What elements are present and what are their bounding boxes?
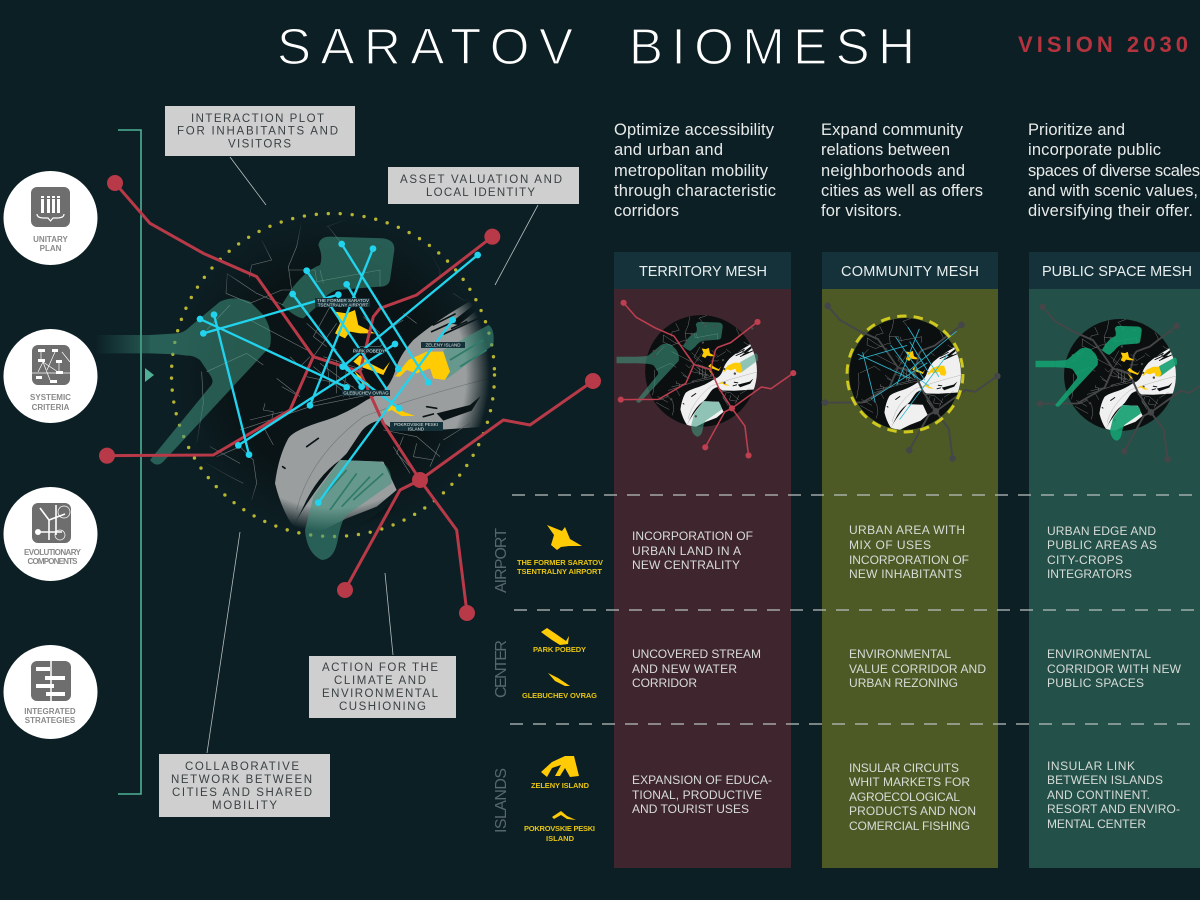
- text block: community airport: [849, 523, 969, 581]
- text block: community objective: for visitors.: [821, 202, 902, 220]
- subtitle: vision 2030: VISION 2030: [1018, 32, 1188, 57]
- map labels: ZELENY ISLAND: [426, 342, 461, 348]
- callout: collaborative network: MOBILITY: [212, 800, 277, 812]
- text block: community airport: NEW INHABITANTS: [849, 567, 962, 581]
- legend: airport: THE FORMER SARATOV: [517, 558, 603, 567]
- text block: community objective: relations between: [821, 141, 950, 159]
- public space mini map: [1036, 304, 1200, 463]
- text block: territory center: AND NEW WATER: [632, 662, 737, 676]
- text block: public space center: CORRIDOR WITH NEW: [1047, 662, 1182, 676]
- text block: territory airport: [632, 529, 753, 572]
- text block: territory center: [632, 647, 761, 690]
- callout: collaborative network: NETWORK BETWEEN: [171, 774, 312, 786]
- text block: territory airport: URBAN LAND IN A: [632, 544, 741, 558]
- text block: territory airport: NEW CENTRALITY: [632, 558, 740, 572]
- icon: evolutionary components: EVOLUTIONARY: [24, 548, 82, 557]
- callout: climate action: [309, 656, 456, 718]
- dashed row dividers: [510, 495, 1200, 724]
- text block: public space center: PUBLIC SPACES: [1047, 676, 1144, 690]
- panel: public space mesh column: PUBLIC SPACE MESH: [1042, 264, 1192, 280]
- map labels: ISLAND: [408, 426, 425, 432]
- legend: glebuchev ovrag: [522, 673, 597, 700]
- text block: public space objective: and with scenic values,: [1028, 182, 1198, 200]
- text block: community islands: COMERCIAL FISHING: [849, 819, 970, 833]
- callout: interaction plot: INTERACTION PLOT: [191, 113, 324, 125]
- callout: asset valuation: LOCAL IDENTITY: [426, 187, 535, 199]
- text block: community islands: [849, 761, 976, 833]
- text block: public space islands: RESORT AND ENVIRO-: [1047, 802, 1180, 816]
- callout: climate action: ACTION FOR THE: [322, 662, 438, 674]
- legend: park pobedy: PARK POBEDY: [533, 645, 586, 654]
- main map: [95, 175, 601, 621]
- map labels: POKROVSKIE PESKI: [394, 422, 438, 427]
- text block: public space objective: spaces of diverse scales: [1028, 162, 1200, 180]
- text block: public space airport: INTEGRATORS: [1047, 567, 1132, 581]
- icon: integrated strategies: [4, 645, 98, 739]
- legend: airport: TSENTRALNY AIRPORT: [517, 567, 602, 576]
- text block: territory islands: [632, 773, 772, 816]
- legend: glebuchev ovrag: GLEBUCHEV OVRAG: [522, 691, 597, 700]
- text block: public space islands: [1047, 759, 1180, 831]
- text block: territory objective: metropolitan mobility: [614, 162, 769, 180]
- callout: interaction plot: FOR INHABITANTS AND: [177, 126, 338, 138]
- panel: territory mesh column: [614, 252, 791, 868]
- text block: territory airport: INCORPORATION OF: [632, 529, 753, 543]
- legend: airport: [517, 525, 603, 576]
- text block: public space objective: diversifying their offer.: [1028, 202, 1193, 220]
- icon: integrated strategies: STRATEGIES: [25, 716, 76, 725]
- icon: evolutionary components: COMPONENTS: [28, 557, 78, 566]
- row label: center: CENTER: [493, 640, 510, 698]
- text block: community objective: Expand community: [821, 121, 964, 139]
- text block: community islands: PRODUCTS AND NON: [849, 804, 976, 818]
- icon: unitary plan: [4, 171, 98, 265]
- text block: public space islands: BETWEEN ISLANDS: [1047, 773, 1163, 787]
- community mini map: [821, 303, 1001, 462]
- title: BIOMESH: [629, 18, 915, 75]
- text block: public space objective: incorporate public: [1028, 141, 1161, 159]
- text block: territory objective: and urban and: [614, 141, 723, 159]
- text block: community islands: WHIT MARKETS FOR: [849, 775, 970, 789]
- callout: interaction plot: VISITORS: [228, 138, 291, 150]
- icon: systemic criteria: [4, 329, 98, 423]
- text block: community airport: INCORPORATION OF: [849, 553, 969, 567]
- text block: public space islands: AND CONTINENT.: [1047, 788, 1150, 802]
- connector lines: [207, 157, 538, 753]
- row label: islands: ISLANDS: [493, 768, 510, 833]
- text block: territory objective: [614, 121, 776, 220]
- icon: unitary plan: PLAN: [40, 244, 62, 253]
- legend: pokrovskie peski island: POKROVSKIE PESKI: [524, 824, 595, 833]
- title: SARATOV: [277, 18, 573, 75]
- text block: territory center: CORRIDOR: [632, 676, 697, 690]
- panel: territory mesh column: TERRITORY MESH: [639, 264, 767, 280]
- icon: systemic criteria: SYSTEMIC: [30, 393, 71, 402]
- text block: community airport: URBAN AREA WITH: [849, 523, 965, 537]
- text block: public space airport: [1047, 524, 1157, 581]
- text block: territory islands: TIONAL, PRODUCTIVE: [632, 788, 762, 802]
- callout: collaborative network: [159, 754, 330, 817]
- legend: pokrovskie peski island: ISLAND: [546, 834, 575, 843]
- icon: unitary plan: UNITARY: [33, 235, 68, 244]
- legend: zeleny island: [531, 756, 590, 790]
- map labels: GLEBUCHEV OVRAG: [343, 390, 389, 396]
- callout: asset valuation: [388, 167, 579, 204]
- text block: territory objective: corridors: [614, 202, 679, 220]
- panel: community mesh column: COMMUNITY MESH: [841, 264, 979, 280]
- territory mini map: [617, 300, 796, 459]
- callout: climate action: ENVIRONMENTAL: [322, 688, 439, 700]
- icon: systemic criteria: CRITERIA: [32, 403, 70, 412]
- text block: community islands: INSULAR CIRCUITS: [849, 761, 959, 775]
- legend: zeleny island: ZELENY ISLAND: [531, 781, 590, 790]
- callout: climate action: CUSHIONING: [339, 701, 426, 713]
- callout: asset valuation: ASSET VALUATION AND: [400, 174, 562, 186]
- text block: community center: ENVIRONMENTAL: [849, 647, 951, 661]
- callout: collaborative network: COLLABORATIVE: [185, 761, 299, 773]
- callout: collaborative network: CITIES AND SHARED: [172, 787, 312, 799]
- text block: community center: URBAN REZONING: [849, 676, 958, 690]
- text block: public space center: ENVIRONMENTAL: [1047, 647, 1151, 661]
- icon: integrated strategies: INTEGRATED: [24, 707, 76, 716]
- legend: pokrovskie peski island: [524, 811, 595, 843]
- text block: territory islands: AND TOURIST USES: [632, 802, 749, 816]
- text block: community islands: AGROECOLOGICAL: [849, 790, 960, 804]
- icon: evolutionary components: [4, 487, 98, 581]
- map labels: PARK POBEDY: [353, 348, 385, 354]
- text block: public space objective: Prioritize and: [1028, 121, 1125, 139]
- text block: territory objective: Optimize accessibility: [614, 121, 775, 139]
- bracket: [118, 130, 154, 794]
- map labels: [315, 298, 465, 432]
- text block: public space center: [1047, 647, 1182, 690]
- panel: community mesh column: [822, 252, 998, 868]
- text block: territory objective: through characteristic: [614, 182, 776, 200]
- legend: park pobedy: [533, 628, 586, 654]
- map labels: THE FORMER SARATOV: [317, 298, 369, 303]
- text block: community objective: [821, 121, 983, 220]
- title: [277, 18, 915, 75]
- row label: airport: AIRPORT: [493, 528, 510, 593]
- dotted ring: [172, 214, 494, 536]
- text block: public space airport: URBAN EDGE AND: [1047, 524, 1156, 538]
- text block: public space islands: INSULAR LINK: [1047, 759, 1135, 773]
- text block: public space airport: CITY-CROPS: [1047, 553, 1123, 567]
- callout: interaction plot: [165, 106, 355, 156]
- text block: public space objective: [1028, 121, 1200, 220]
- text block: community objective: cities as well as offers: [821, 182, 983, 200]
- panel: public space mesh column: [1029, 252, 1200, 868]
- text block: public space islands: MENTAL CENTER: [1047, 817, 1146, 831]
- text block: community airport: MIX OF USES: [849, 538, 931, 552]
- text block: territory islands: EXPANSION OF EDUCA-: [632, 773, 772, 787]
- map labels: TSENTRALNY AIRPORT: [318, 302, 369, 308]
- text block: public space airport: PUBLIC AREAS AS: [1047, 538, 1157, 552]
- text block: community objective: neighborhoods and: [821, 162, 965, 180]
- text block: community center: VALUE CORRIDOR AND: [849, 662, 986, 676]
- text block: territory center: UNCOVERED STREAM: [632, 647, 761, 661]
- text block: community center: [849, 647, 986, 690]
- callout: climate action: CLIMATE AND: [334, 675, 426, 687]
